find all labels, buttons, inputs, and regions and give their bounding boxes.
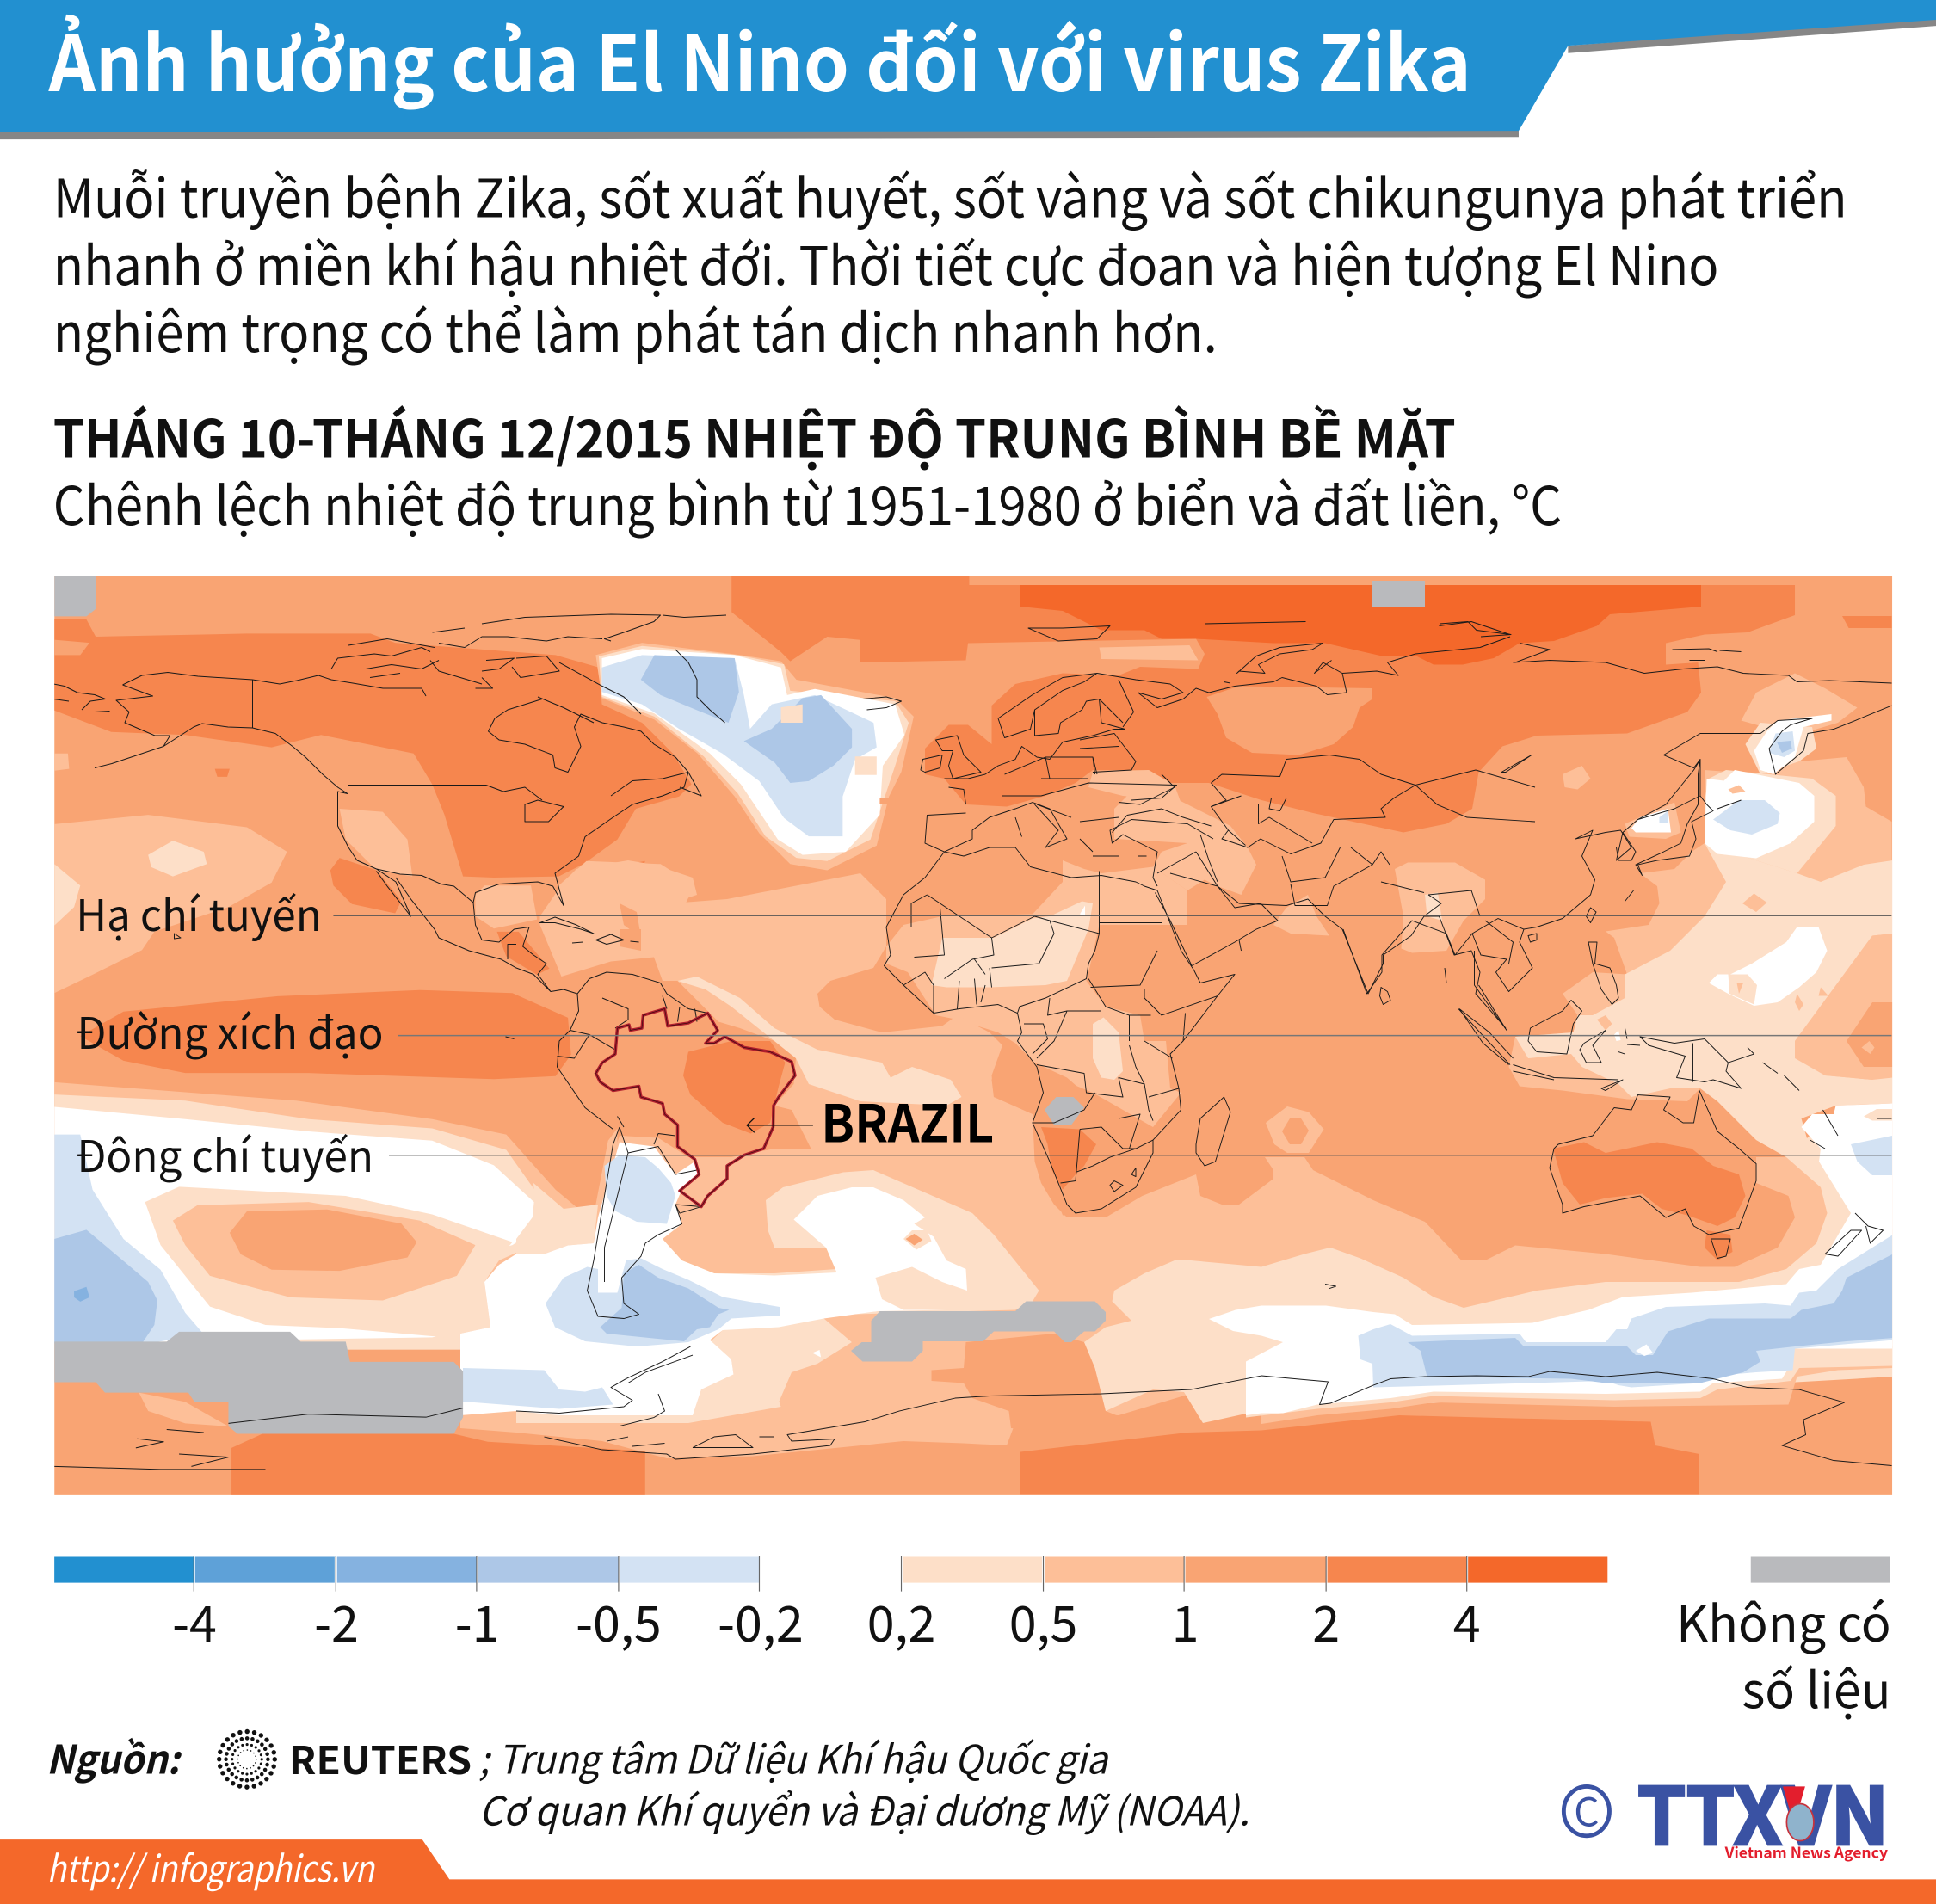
Eurasia and Africa contours <box>860 585 1795 1127</box>
south Atlantic, Indian Ocean and Southern Ocean contours <box>460 860 1893 1495</box>
footer URL: http:// infographics.vn <box>47 1840 375 1894</box>
colour legend: 1 <box>1172 1584 1199 1656</box>
east Asia and west Pacific contours <box>1395 616 1893 1187</box>
equator label: Đường xích đạo <box>76 1000 384 1062</box>
TTXVN logo: Vietnam News Agency <box>1724 1841 1888 1863</box>
tropic of capricorn label: Đông chí tuyến <box>76 1123 373 1185</box>
Brazil callout with arrow: BRAZIL <box>821 1082 994 1157</box>
Brazil callout with arrow <box>747 1082 994 1157</box>
tropic of cancer label: Hạ chí tuyến <box>76 882 322 944</box>
colour legend: số liệu <box>1742 1650 1891 1722</box>
no-data grey areas <box>54 576 1425 1433</box>
colour legend: 0,2 <box>867 1584 935 1656</box>
intro text: nhanh ở miền khí hậu nhiệt đới. Thời tiết cực đoan và hiện tượng El Nino <box>53 223 1718 300</box>
colour legend: 2 <box>1312 1584 1340 1656</box>
source credits <box>46 1728 1249 1838</box>
colour legend: -4 <box>172 1584 217 1656</box>
Antarctic coastal stripes <box>1261 1366 1893 1424</box>
Indian Ocean ring <box>1266 1106 1324 1153</box>
coastlines: east Asia and Oceania <box>1343 622 1892 1259</box>
Pacific and North America contours <box>54 576 969 1426</box>
Greenland and north Atlantic cool zone <box>595 643 914 870</box>
source credits: Cơ quan Khí quyển và Đại dương Mỹ (NOAA). <box>479 1781 1249 1838</box>
intro text: nghiêm trọng có thể làm phát tán dịch nhanh hơn. <box>53 290 1218 367</box>
title: Ảnh hưởng của El Nino đối với virus Zika <box>48 3 1471 114</box>
source credits: REUTERS <box>289 1729 472 1785</box>
coastlines: Americas <box>53 614 726 1130</box>
colour legend <box>54 1556 1891 1722</box>
colour legend: -0,2 <box>718 1584 804 1656</box>
colour legend: -2 <box>314 1584 359 1656</box>
footer bar <box>0 1839 1936 1904</box>
coastlines: southern continents <box>516 1117 1892 1466</box>
colour legend: Không có <box>1676 1584 1891 1656</box>
south polar warm block <box>231 1433 645 1495</box>
source credits: ; Trung tâm Dữ liệu Khí hậu Quốc gia <box>479 1728 1109 1785</box>
colour legend: 0,5 <box>1009 1584 1077 1656</box>
title banner <box>0 0 1936 139</box>
chart heading: THÁNG 10-THÁNG 12/2015 NHIỆT ĐỘ TRUNG BÌNH BỀ MẶT <box>53 398 1456 473</box>
icon: Reuters dot logo <box>219 1732 274 1787</box>
chart subheading: Chênh lệch nhiệt độ trung bình từ 1951-1980 ở biển và đất liền, °C <box>53 463 1562 540</box>
colour legend: 4 <box>1453 1584 1481 1656</box>
TTXVN logo: TTXVN <box>1637 1753 1889 1868</box>
coastlines and borders: Europe, Africa, west Asia <box>863 622 1535 1213</box>
colour legend: -1 <box>455 1584 499 1656</box>
intro text: Muỗi truyền bệnh Zika, sốt xuất huyết, sốt vàng và sốt chikungunya phát triển <box>53 156 1847 233</box>
TTXVN logo: C <box>1574 1781 1600 1838</box>
Africa and Australia warm patches <box>1553 1143 1746 1226</box>
colour legend: -0,5 <box>576 1584 662 1656</box>
intro text <box>53 156 1847 367</box>
Brazil outline <box>595 1009 795 1207</box>
source credits: Nguồn: <box>46 1728 182 1785</box>
latitude lines <box>333 915 1891 1155</box>
world temperature anomaly map <box>53 576 1894 1496</box>
